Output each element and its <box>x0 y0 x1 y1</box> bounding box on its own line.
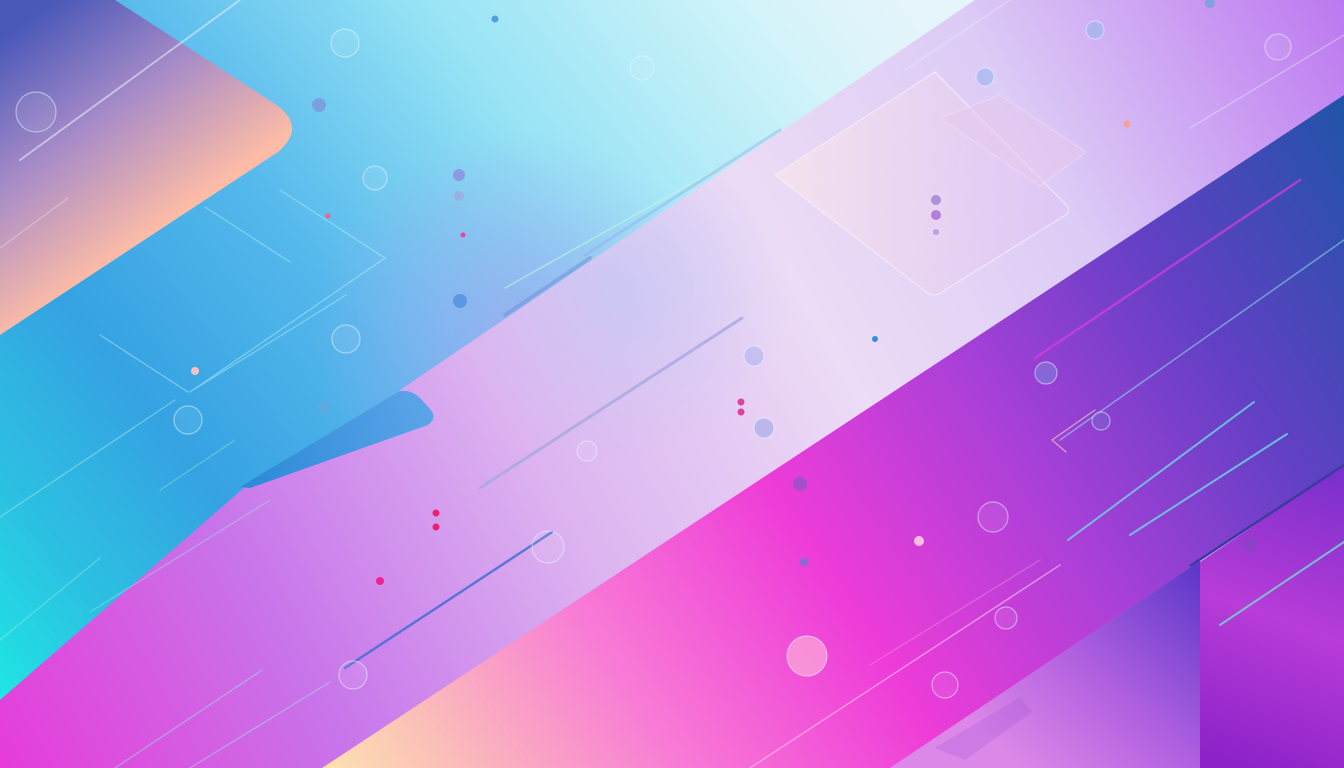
panel: dark blue tab <box>240 391 433 488</box>
panel: bottom right card <box>1200 465 1344 768</box>
panel: magenta diagonal band <box>322 95 1344 768</box>
panel: bottom right violet wedge <box>890 561 1200 768</box>
dots <box>191 0 1258 585</box>
panel: translucent diamond card <box>775 72 1086 295</box>
panel: top-left peach card <box>0 0 292 335</box>
panel: cyan band <box>0 0 975 700</box>
panel: small wedge tab <box>935 697 1032 760</box>
dark edge line <box>1190 465 1344 566</box>
